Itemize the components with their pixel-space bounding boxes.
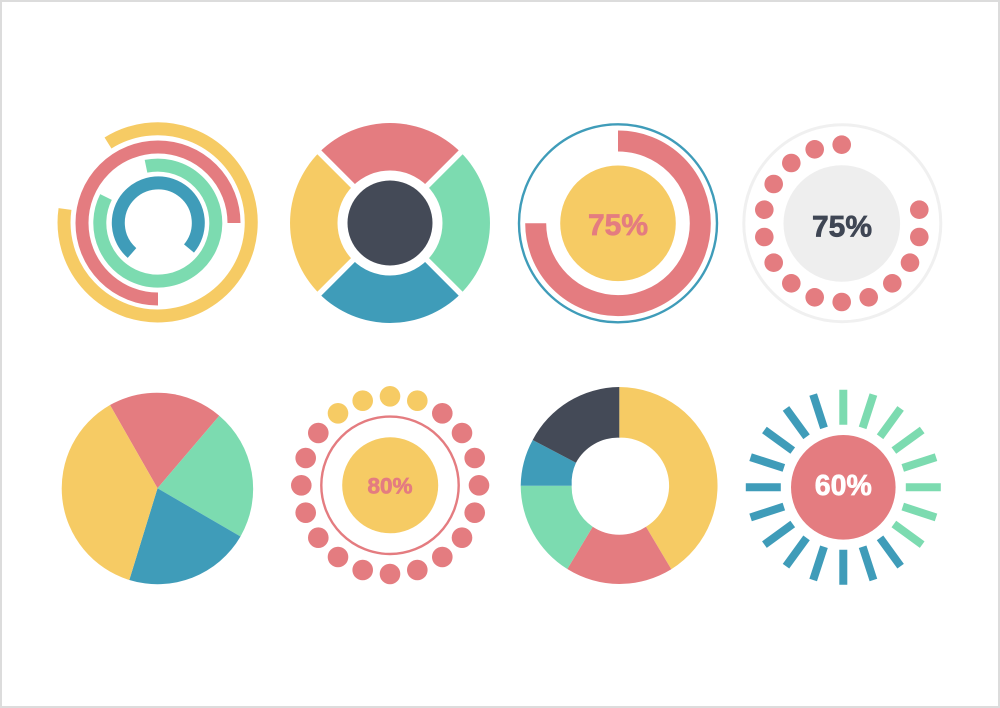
- green rays: [843, 390, 941, 545]
- segment: green right: [390, 152, 490, 294]
- center circle: [342, 437, 438, 533]
- segment: yellow left: [290, 152, 390, 294]
- slice: dark: [533, 387, 619, 463]
- center circle: [560, 166, 676, 281]
- segment: red top: [319, 123, 461, 223]
- slice: red: [567, 527, 671, 584]
- value label: 75%: [588, 209, 648, 242]
- value label: 75%: [812, 211, 872, 244]
- chart: donut: [521, 387, 718, 584]
- slice: blue: [521, 440, 576, 486]
- center circle: [791, 435, 896, 540]
- arc: red: [82, 147, 234, 299]
- yellow dots: [328, 386, 428, 424]
- arc: yellow outer: [64, 129, 251, 316]
- segment: blue bottom: [319, 223, 461, 323]
- center: dark circle: [348, 180, 432, 266]
- center circle: [784, 165, 900, 282]
- slice: red: [110, 393, 219, 488]
- chart: 75% dotted ring: [744, 125, 941, 322]
- chart: four-segment ring: [290, 123, 490, 323]
- chart: 60% sunburst: [746, 390, 941, 585]
- blue rays: [746, 395, 901, 585]
- value label: 80%: [367, 474, 413, 498]
- progress arc: [536, 141, 700, 306]
- arc: blue inner: [118, 183, 198, 253]
- red dots: [291, 403, 489, 584]
- chart: 80% dotted ring: [291, 386, 489, 584]
- slice: green: [521, 486, 593, 569]
- slice: blue: [129, 488, 240, 584]
- inner ring: [321, 417, 459, 554]
- arc: green: [100, 165, 216, 281]
- chart: 75% progress ring: [519, 124, 717, 322]
- dots: [755, 135, 929, 311]
- outer ring: [744, 125, 941, 322]
- value label: 60%: [815, 470, 872, 502]
- chart: concentric arcs: [64, 129, 251, 316]
- slice: yellow: [62, 405, 158, 580]
- slice: yellow: [619, 387, 718, 569]
- slice: green: [158, 416, 253, 536]
- chart: pie: [62, 393, 253, 584]
- outer ring: [519, 124, 717, 322]
